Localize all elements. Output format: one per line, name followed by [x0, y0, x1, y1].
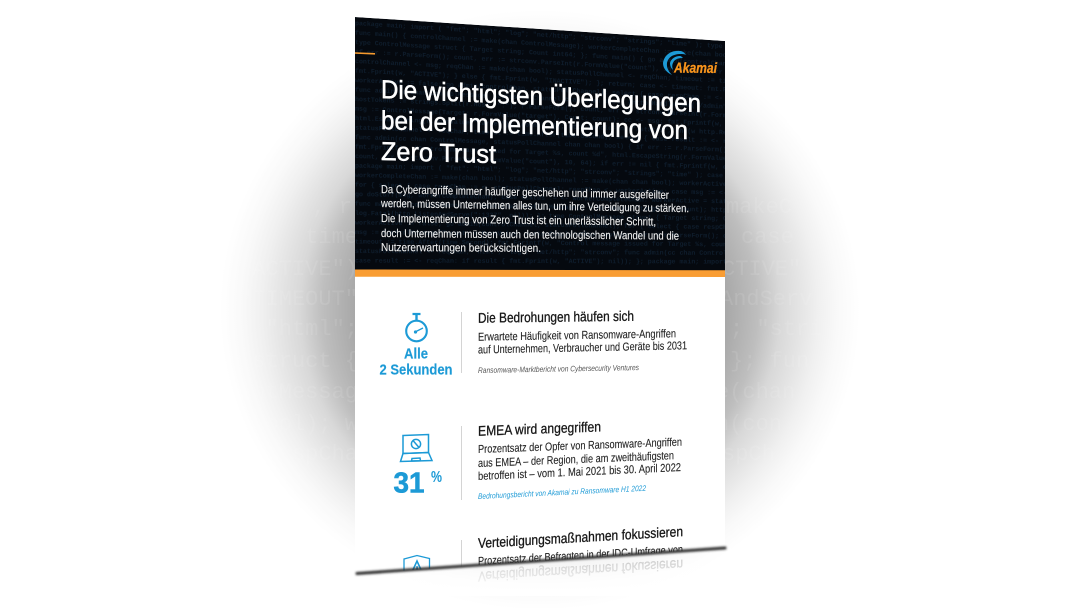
- document bottom edge: [357, 548, 725, 574]
- ghost code text left: ool); w: [266, 412, 358, 437]
- code texture: func admin(cc chan ControlMessage, statusPollChannel chan chan bool) {http.HandleFunc("/admin", func(w http.ResponseWriter, r *http: [355, 87, 873, 117]
- percent sign: %: [431, 469, 442, 486]
- heading: threats: Die Bedrohungen häufen sich: [478, 308, 634, 326]
- ghost code text right: e(chan: [716, 380, 795, 405]
- ghost code text left: respCha: [266, 442, 358, 467]
- code texture: case result := <- reqChan: if result { fmt.Fprint(w, "ACTIVE"); nil)); }; package main; import ( "fmt"; timeout := time.After; Target %s, count %d: [355, 258, 933, 266]
- threats description: auf Unternehmen, Verbraucher und Geräte bis 2031: [478, 340, 687, 356]
- code texture: func admin(cc chan ControlMessage, statusPollChannel chan chan bool) { if err := r.ParseForm(); count, err := strconv.ParseInt(r.Fo: [355, 134, 873, 159]
- code texture: go doStuff(msg, workerCompleteChan); case status := <- workerCompleteChan: workerActive = status; }}}; r.ParseForm(); strconv.ParseInt: [355, 191, 885, 208]
- code texture: workerActive := false; go admin(controlChannel, statusPollChannel); for { select { case respChan := "strings": "t go admin(contr: [355, 220, 862, 233]
- code texture: log.Fatal(http.ListenAndServe(":1337", nil)); }; type ControlMessage struct { Target string; Count int64; }; "strings"; "time"; result { fmt: [355, 210, 909, 225]
- EMEA source: Bedrohungsbericht von Akamai zu Ransomware H1 2022: [478, 484, 646, 501]
- icon: stopwatch: [406, 314, 427, 341]
- intro text: doch Unternehmen müssen auch den technologischen Wandel und die: [381, 228, 679, 243]
- stat: every 2 seconds: Alle: [404, 346, 428, 362]
- ghost code text left: time: [305, 225, 358, 250]
- title: bei der Implementierung von: [381, 105, 688, 145]
- code texture: if err := r.ParseForm(); count, err := strconv.ParseInt(r.FormValue("count"), 10, 64); if err != nil { fmt.Fprintf(w, err.Error: [355, 49, 857, 84]
- code texture: statusPollChannel <- reqChan; timeout := time.After(time.Second); select { case result := <- reqChan: if result { fmt.Fprint(w, "ACT: [355, 125, 877, 151]
- code texture: func main() { controlChannel := make(chan ControlMessage); workerCompleteChan := make(chan bool); statusPollChannel; for { sel: [355, 30, 853, 67]
- code texture: timeout := time.After(time.Second); fmt.Fprintf(w, "Control message issued for Target %s, count %d", html; nil)); }; package main; import; worke: [355, 239, 925, 250]
- ghost code text left: ntMessag: [252, 380, 358, 405]
- code texture: workerCompleteChan := make(chan bool); statusPollChannel := make(chan chan bool); workerActive := false;go admin(controlChannel, type: [355, 172, 881, 192]
- code texture: fmt.Fprintf(w, "Control message issued for Target %s, count %d", html.EscapeString(r.FormValue("target")), count); }); func admin(cc ch: [355, 144, 889, 167]
- icon: logo arcs: [663, 51, 686, 75]
- code texture: fmt.Fprint(w, "ACTIVE"); } else { fmt.Fprint(w, "INACTIVE"); }; return; case <- timeout: fmt.Fprint(w, "TIMEOUT"); }; }); log.Fa: [355, 68, 861, 100]
- heading: EMEA: EMEA wird angegriffen: [478, 418, 601, 439]
- ghost code text left: "ACTIVE"): [239, 257, 358, 282]
- stat: every 2 seconds: [380, 347, 452, 375]
- title: [382, 80, 700, 164]
- panel: EMEA: [394, 418, 682, 501]
- stat: every 2 seconds: 2 Sekunden: [380, 362, 452, 378]
- intro text: Die Implementierung von Zero Trust ist ein unerlässlicher Schritt,: [381, 213, 656, 229]
- ghost code text right: AndServ: [720, 287, 812, 312]
- intro text: Nutzererwartungen berücksichtigen.: [381, 242, 541, 255]
- icon: laptop blocked: [400, 434, 432, 462]
- ghost code text right: makeC: [726, 195, 792, 220]
- ghost code text left: [239, 195, 358, 467]
- ghost code text left: struct {: [252, 349, 358, 374]
- panel: dark hero header: [355, 17, 725, 270]
- intro text: Da Cyberangriffe immer häufiger geschehen und immer ausgefeilter: [381, 184, 669, 202]
- panel: defense: [403, 527, 682, 570]
- EMEA description: [478, 437, 682, 483]
- heading: defense: Verteidigungsmaßnahmen fokussieren: [478, 523, 683, 551]
- code texture: package main; import ( "fmt"; "html"; "log"; "net/http"; "strconv"; "strings"; "time" ); case result := <- reqChan: if result { fmt.Fprint: [355, 163, 901, 184]
- code texture: for { select { case respChan := <- statusPollChannel: respChan <- workerActive; case msg := <- controlChannel: workerActive = status: [355, 182, 877, 200]
- code texture: statusPollChannel <- reqChan; "html"; "log"; "net/http"; "strconv"; func admin(cc chan ControlMessage; issued for Target %s, err := strconv: [355, 248, 905, 258]
- document page: [355, 17, 725, 570]
- code texture: html.EscapeString(r.FormValue("target")), count); }); http.HandleFunc("/status",func(w http.ResponseWriter, r *http.Request) { reqC: [355, 115, 873, 142]
- ghost code text right: }; fun: [730, 349, 809, 374]
- code texture: controlChannel <- msg; reqChan := make(chan bool); statusPollChannel <- reqChan; timeout := time.After(time.Second); "status",func: [355, 58, 869, 92]
- code texture: msg := ControlMessage{Target: r.FormValue("target"), Count: count}; cc <- msg; fmt.Fprintf(w, "Control message issued for Target: [355, 106, 861, 133]
- intro text: [380, 184, 689, 255]
- stat: 31 percent: 31: [394, 468, 424, 500]
- code texture: count, err := strconv.ParseInt(r.FormValue("count"), 10, 64); if err != nil { fmt.Fprintf(w, err.Error()); return; }; "count"), 10, 64: [355, 153, 885, 175]
- ghost code text left: , r: [312, 195, 352, 220]
- accent line: [355, 52, 375, 55]
- title: Zero Trust: [381, 136, 497, 169]
- ghost code text right: case: [741, 225, 794, 250]
- code texture: workerActive := false; go admin(controlChan, statusPollChannel); select { case respChan := <- statusPollChannel: respChan <- wor: [355, 77, 861, 109]
- code texture: package main; import ( "fmt"; "html"; "log"; "net/http"; "strconv"; "strings"; "time" ); type ControlMessage struct: [355, 20, 810, 56]
- ghost code text left: "html";: [266, 317, 358, 342]
- logo: Akamai: [663, 51, 718, 77]
- icon: shield: [403, 554, 430, 570]
- intro text: werden, müssen Unternehmen alles tun, um ihre Verteidigung zu stärken.: [380, 198, 689, 215]
- ghost code text right: ; "stri: [730, 317, 822, 342]
- panel: threats: [380, 308, 687, 378]
- defense description: Prozentsatz der Befragten in der IDC-Umfrage von: [478, 544, 683, 568]
- code texture: type ControlMessage struct { Target string; Count int64; }; func main() { go admin(controlChannel, statusPollChannel); for {: [355, 39, 845, 75]
- orange band: [355, 270, 725, 277]
- ghost code text right: [716, 195, 822, 467]
- code texture: msg := ControlMessage{Target: r.FormValue; workerCompleteChan: worker; err := r.ParseForm(); count, err := strconv.ParseInt workerCompleteCh: [355, 229, 909, 241]
- ghost code text right: CTIVE": [722, 257, 801, 282]
- EMEA description: aus EMEA – der Region, die am zweithäufigsten: [478, 450, 674, 470]
- code texture: [355, 21, 725, 265]
- threats description: [478, 329, 687, 354]
- reflected heading: Verteidigungsmaßnahmen fokussieren: [478, 557, 683, 585]
- EMEA description: betroffen ist – vom 1. Mai 2021 bis 30. April 2022: [478, 462, 681, 483]
- threats description: Erwartete Häufigkeit von Ransomware-Angriffen: [478, 328, 676, 344]
- ghost code text right: n(con: [716, 412, 782, 437]
- EMEA description: Prozentsatz der Opfer von Ransomware-Angriffen: [478, 437, 682, 456]
- ghost code text right: spCh: [722, 442, 775, 467]
- title: Die wichtigsten Überlegungen: [381, 74, 701, 118]
- reflection below document: [355, 548, 725, 596]
- code texture: hostTokens := strings.Split(r.Host, ":"); r.ParseForm(); count, err := strconv.ParseInt(r.FormValue("count"), 10, 64); if err != nil {: [355, 96, 885, 126]
- code texture: func main() { controlChannel := make(chan ControlMessage); r.FormValue("target"); count); http.HandleFunc; "time"; reqChan: string(r.Form: [355, 201, 897, 217]
- ghost code text left: "TIMEOUT": [239, 287, 358, 312]
- logo wordmark: Akamai: [673, 60, 718, 77]
- threats source: Ransomware-Marktbericht von Cybersecurity Ventures: [478, 363, 639, 375]
